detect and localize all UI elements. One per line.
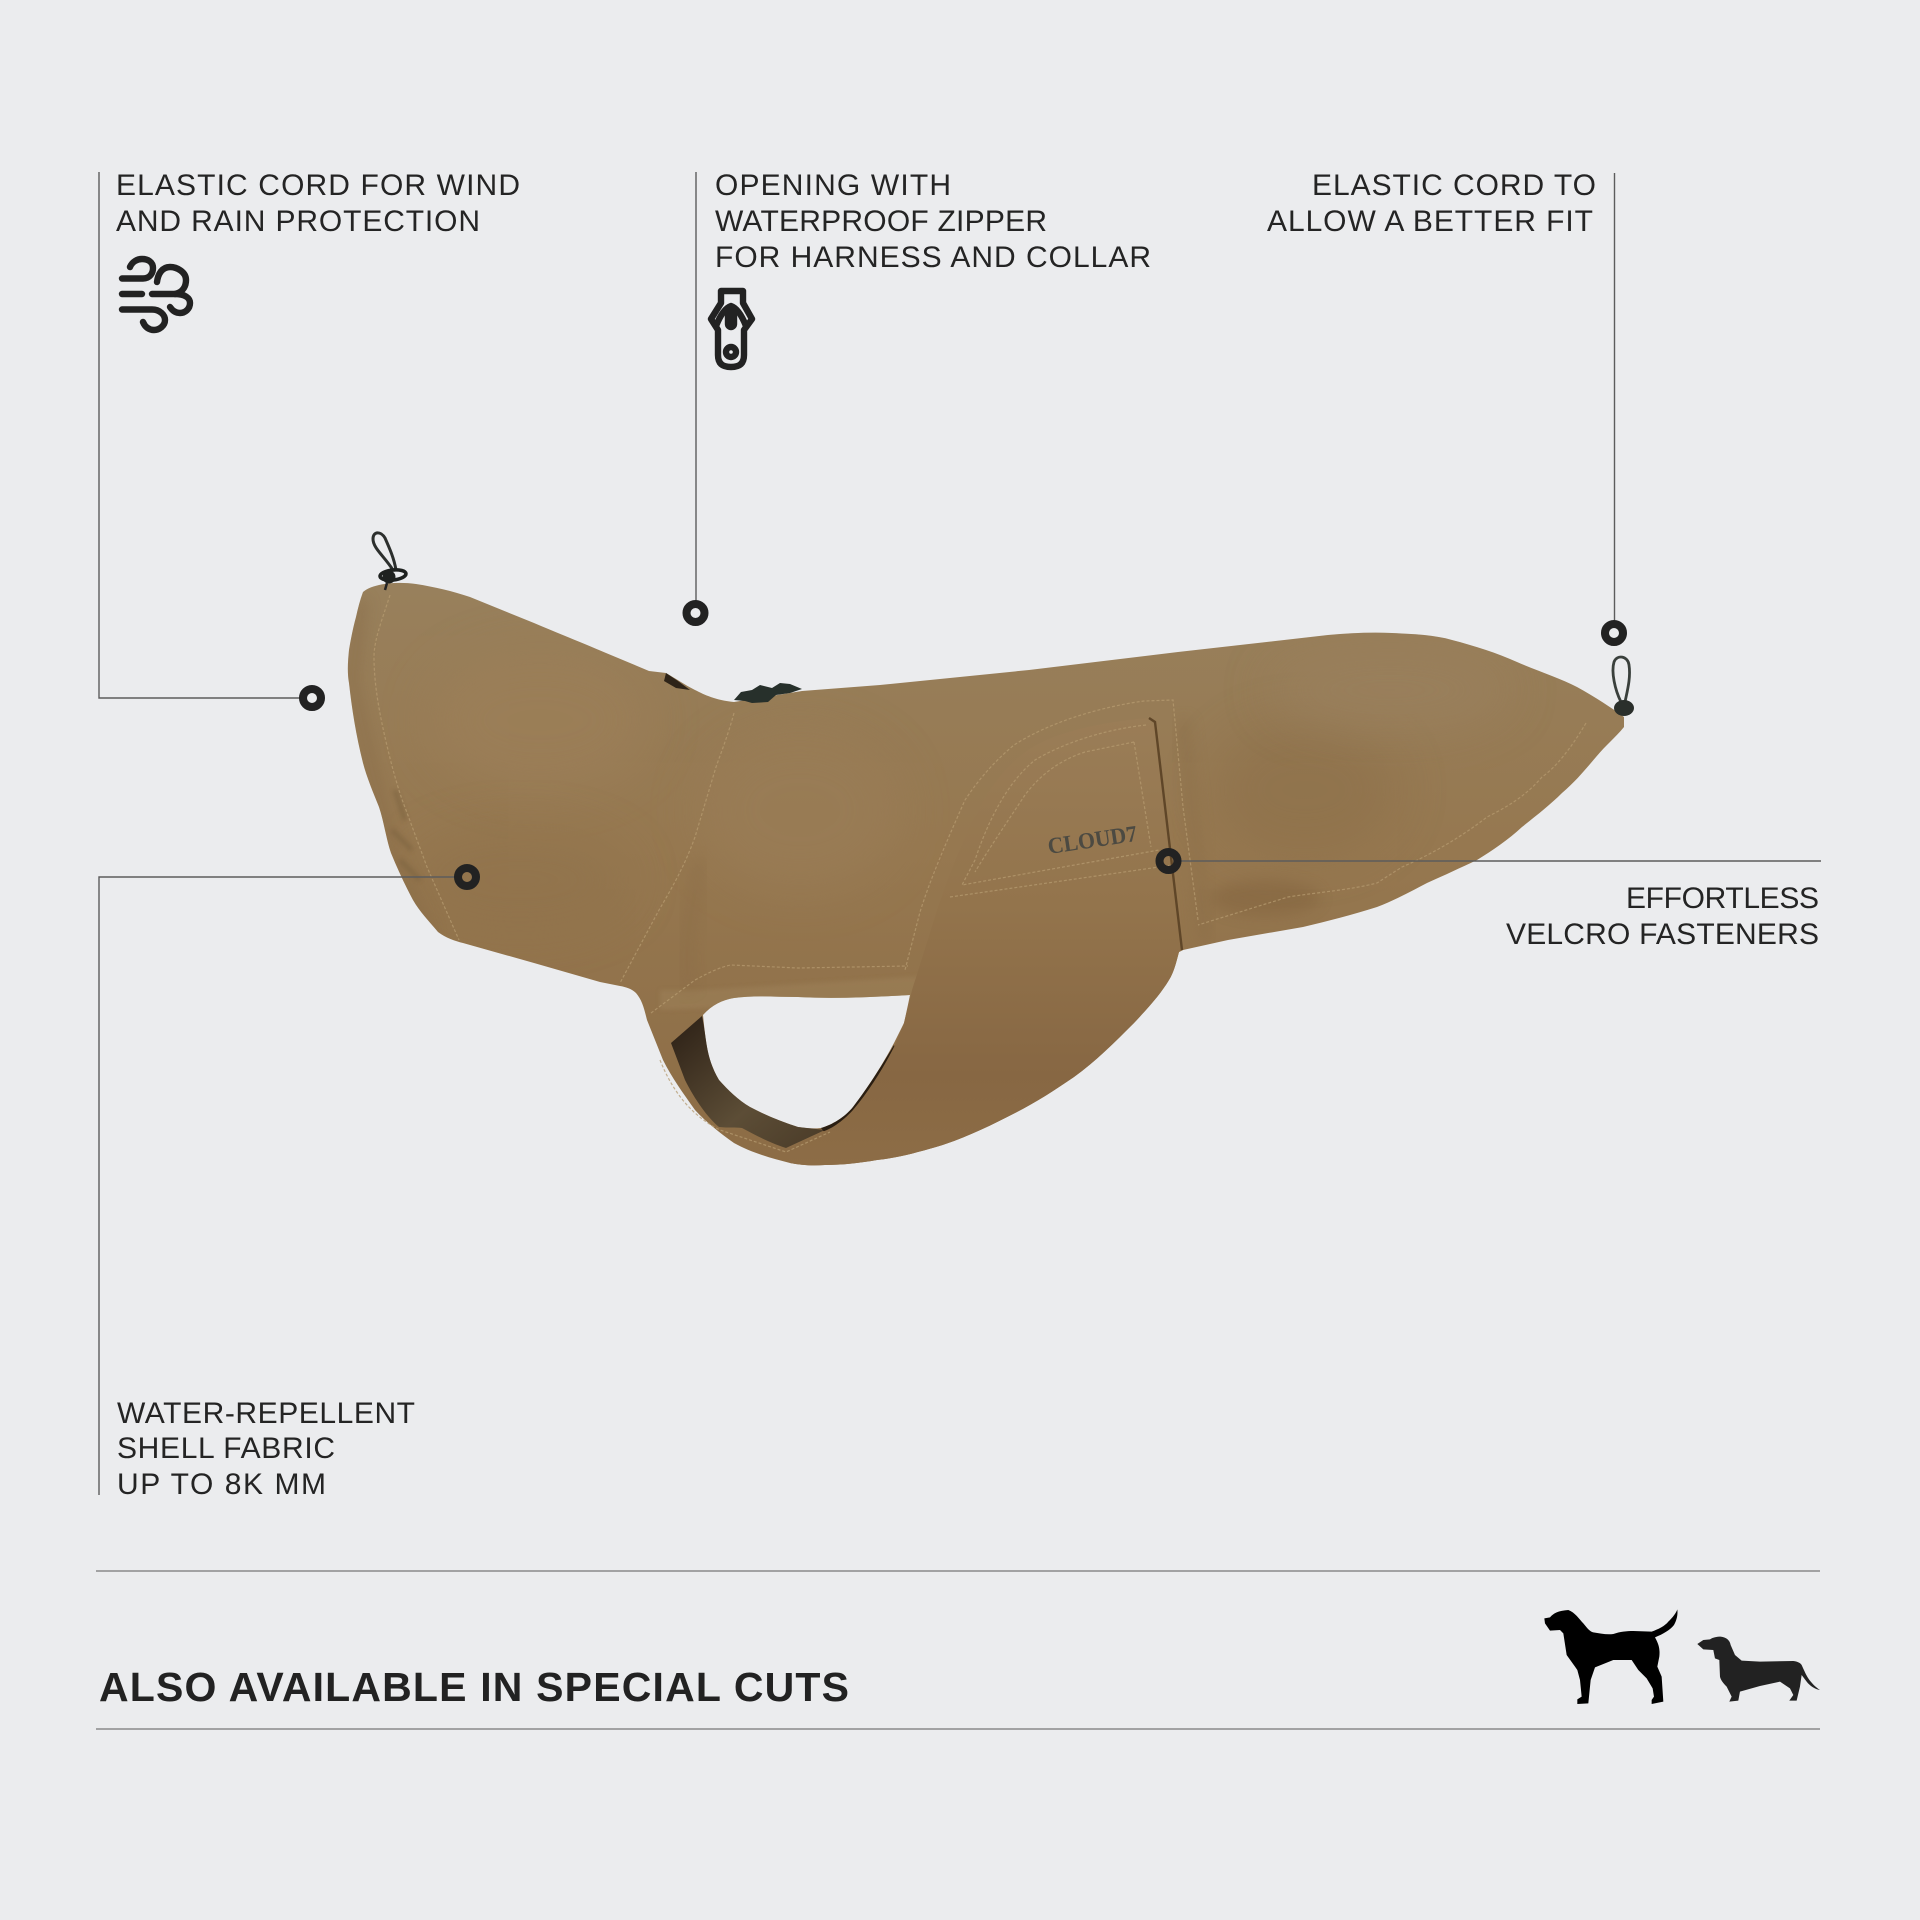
marker xyxy=(1160,852,1178,870)
icon: wind xyxy=(122,259,190,330)
leader line xyxy=(695,172,697,602)
marker xyxy=(458,868,476,886)
callout: water-repellent fabric xyxy=(99,868,476,1501)
text xyxy=(117,1397,415,1501)
brand label: CLOUD7 xyxy=(1046,821,1139,859)
leader line xyxy=(99,172,300,698)
text: VELCRO FASTENERS xyxy=(1506,918,1819,951)
coat body xyxy=(348,583,1624,1165)
marker xyxy=(686,604,704,622)
text: AND RAIN PROTECTION xyxy=(116,205,480,238)
text: ALLOW A BETTER FIT xyxy=(1267,205,1593,238)
text: SHELL FABRIC xyxy=(117,1432,335,1465)
footer top rule xyxy=(96,1570,1820,1572)
callout: opening with waterproof zipper xyxy=(686,169,1151,622)
text: OPENING WITH xyxy=(715,169,951,202)
leader line xyxy=(1614,173,1616,622)
footer heading: ALSO AVAILABLE IN SPECIAL CUTS xyxy=(99,1664,849,1710)
neck seam stitching xyxy=(620,713,734,983)
callout: elastic cord fit xyxy=(1267,169,1623,642)
chest hem stitching xyxy=(651,965,908,1013)
leader line xyxy=(1178,860,1821,862)
zipper pull xyxy=(734,683,802,703)
text: FOR HARNESS AND COLLAR xyxy=(715,241,1151,274)
icon: zipper xyxy=(711,291,752,367)
front cord loop xyxy=(373,533,406,590)
text xyxy=(116,169,520,238)
footer bottom rule xyxy=(96,1728,1820,1730)
text xyxy=(1506,882,1819,951)
text: WATERPROOF ZIPPER xyxy=(715,205,1047,238)
flap stitching xyxy=(962,725,1159,885)
marker xyxy=(1605,624,1623,642)
inner lining xyxy=(671,1016,825,1148)
text xyxy=(715,169,1151,274)
infographic canvas xyxy=(96,172,1821,1730)
callout: elastic cord for wind xyxy=(99,169,520,707)
neck zipper slit xyxy=(664,673,690,690)
velcro flap xyxy=(786,718,1183,1165)
flap dark edge xyxy=(1149,718,1182,950)
text: UP TO 8K MM xyxy=(117,1468,326,1501)
text xyxy=(1267,169,1596,238)
product: dog raincoat xyxy=(348,533,1634,1165)
icon: dachshund silhouette xyxy=(1697,1637,1820,1702)
hood seam stitching xyxy=(374,595,459,940)
callout: velcro fasteners xyxy=(1160,852,1821,951)
marker xyxy=(303,689,321,707)
text: ELASTIC CORD TO xyxy=(1312,169,1596,202)
fabric shading xyxy=(352,600,1510,1010)
text: EFFORTLESS xyxy=(1626,882,1819,915)
rear cord loop xyxy=(1613,657,1634,716)
rear hem stitching xyxy=(1198,723,1586,925)
text: WATER-REPELLENT xyxy=(117,1397,415,1430)
leader line xyxy=(99,877,457,1495)
icon: large dog silhouette xyxy=(1544,1609,1677,1704)
back flap stitching xyxy=(905,700,1198,970)
dark inner shadow xyxy=(821,1045,899,1134)
text: ELASTIC CORD FOR WIND xyxy=(116,169,520,202)
